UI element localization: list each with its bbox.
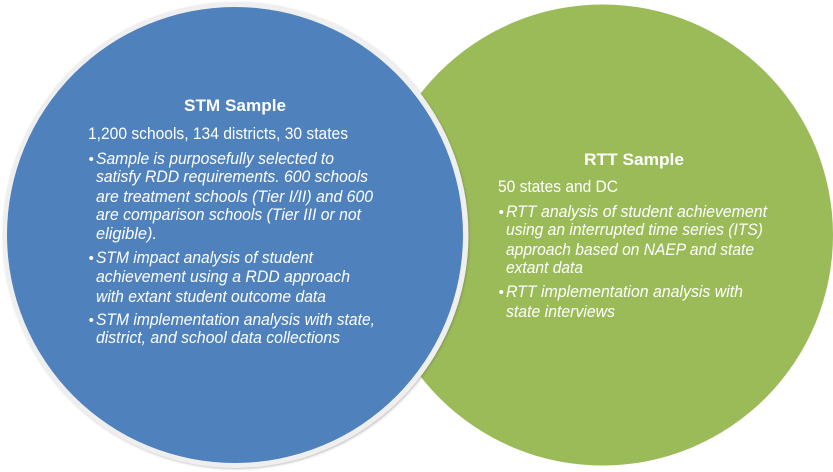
heading: RTT Sample: RTT Sample	[584, 151, 684, 169]
text: RTT bullet 1	[498, 203, 768, 277]
text: RTT bullet 2: state interviews	[506, 303, 615, 321]
text: STM bullet 1: are treatment schools (Tier I/II) and 600	[96, 188, 374, 206]
text: STM bullet 2: with extant student outcome data	[96, 288, 326, 306]
text: STM bullet 1	[88, 150, 374, 243]
text: RTT sample size: 50 states and DC	[498, 178, 618, 196]
heading: STM Sample: STM Sample	[184, 97, 286, 115]
text: STM bullet 1: eligible).	[96, 225, 157, 243]
text: STM bullet 3: •	[88, 312, 94, 329]
text: RTT bullet 2: RTT implementation analysis with	[506, 283, 743, 301]
text: RTT bullet 1: approach based on NAEP and state	[506, 241, 754, 259]
text: STM bullet 2	[88, 249, 350, 306]
text: RTT bullet 2	[498, 283, 743, 321]
text: STM bullet 1: are comparison schools (Tier III or not	[96, 206, 362, 224]
text: RTT bullet 1: using an interrupted time series (ITS)	[506, 221, 763, 239]
text: STM bullet 2: achievement using a RDD approach	[96, 268, 350, 286]
text: STM bullet 3: district, and school data collections	[96, 329, 340, 347]
text: STM bullet 1: satisfy RDD requirements. 600 schools	[96, 168, 368, 186]
text: STM bullet 3: STM implementation analysis with state,	[96, 311, 375, 329]
text: STM bullet 2: •	[88, 250, 94, 267]
panel: RTT Sample circle	[372, 4, 833, 466]
text: STM bullet 3	[88, 311, 375, 347]
text: RTT bullet 2: •	[498, 284, 504, 301]
text: STM sample size: 1,200 schools, 134 districts, 30 states	[88, 125, 348, 143]
text: STM bullet 2: STM impact analysis of student	[96, 249, 314, 267]
text: RTT bullet 1: extant data	[506, 259, 583, 277]
text: RTT bullet 1: RTT analysis of student achievement	[506, 203, 768, 221]
text: RTT bullet 1: •	[498, 204, 504, 221]
text: STM bullet 1: •	[88, 151, 94, 168]
text: STM bullet 1: Sample is purposefully selected to	[96, 150, 334, 168]
panel: STM Sample circle	[2, 2, 468, 468]
